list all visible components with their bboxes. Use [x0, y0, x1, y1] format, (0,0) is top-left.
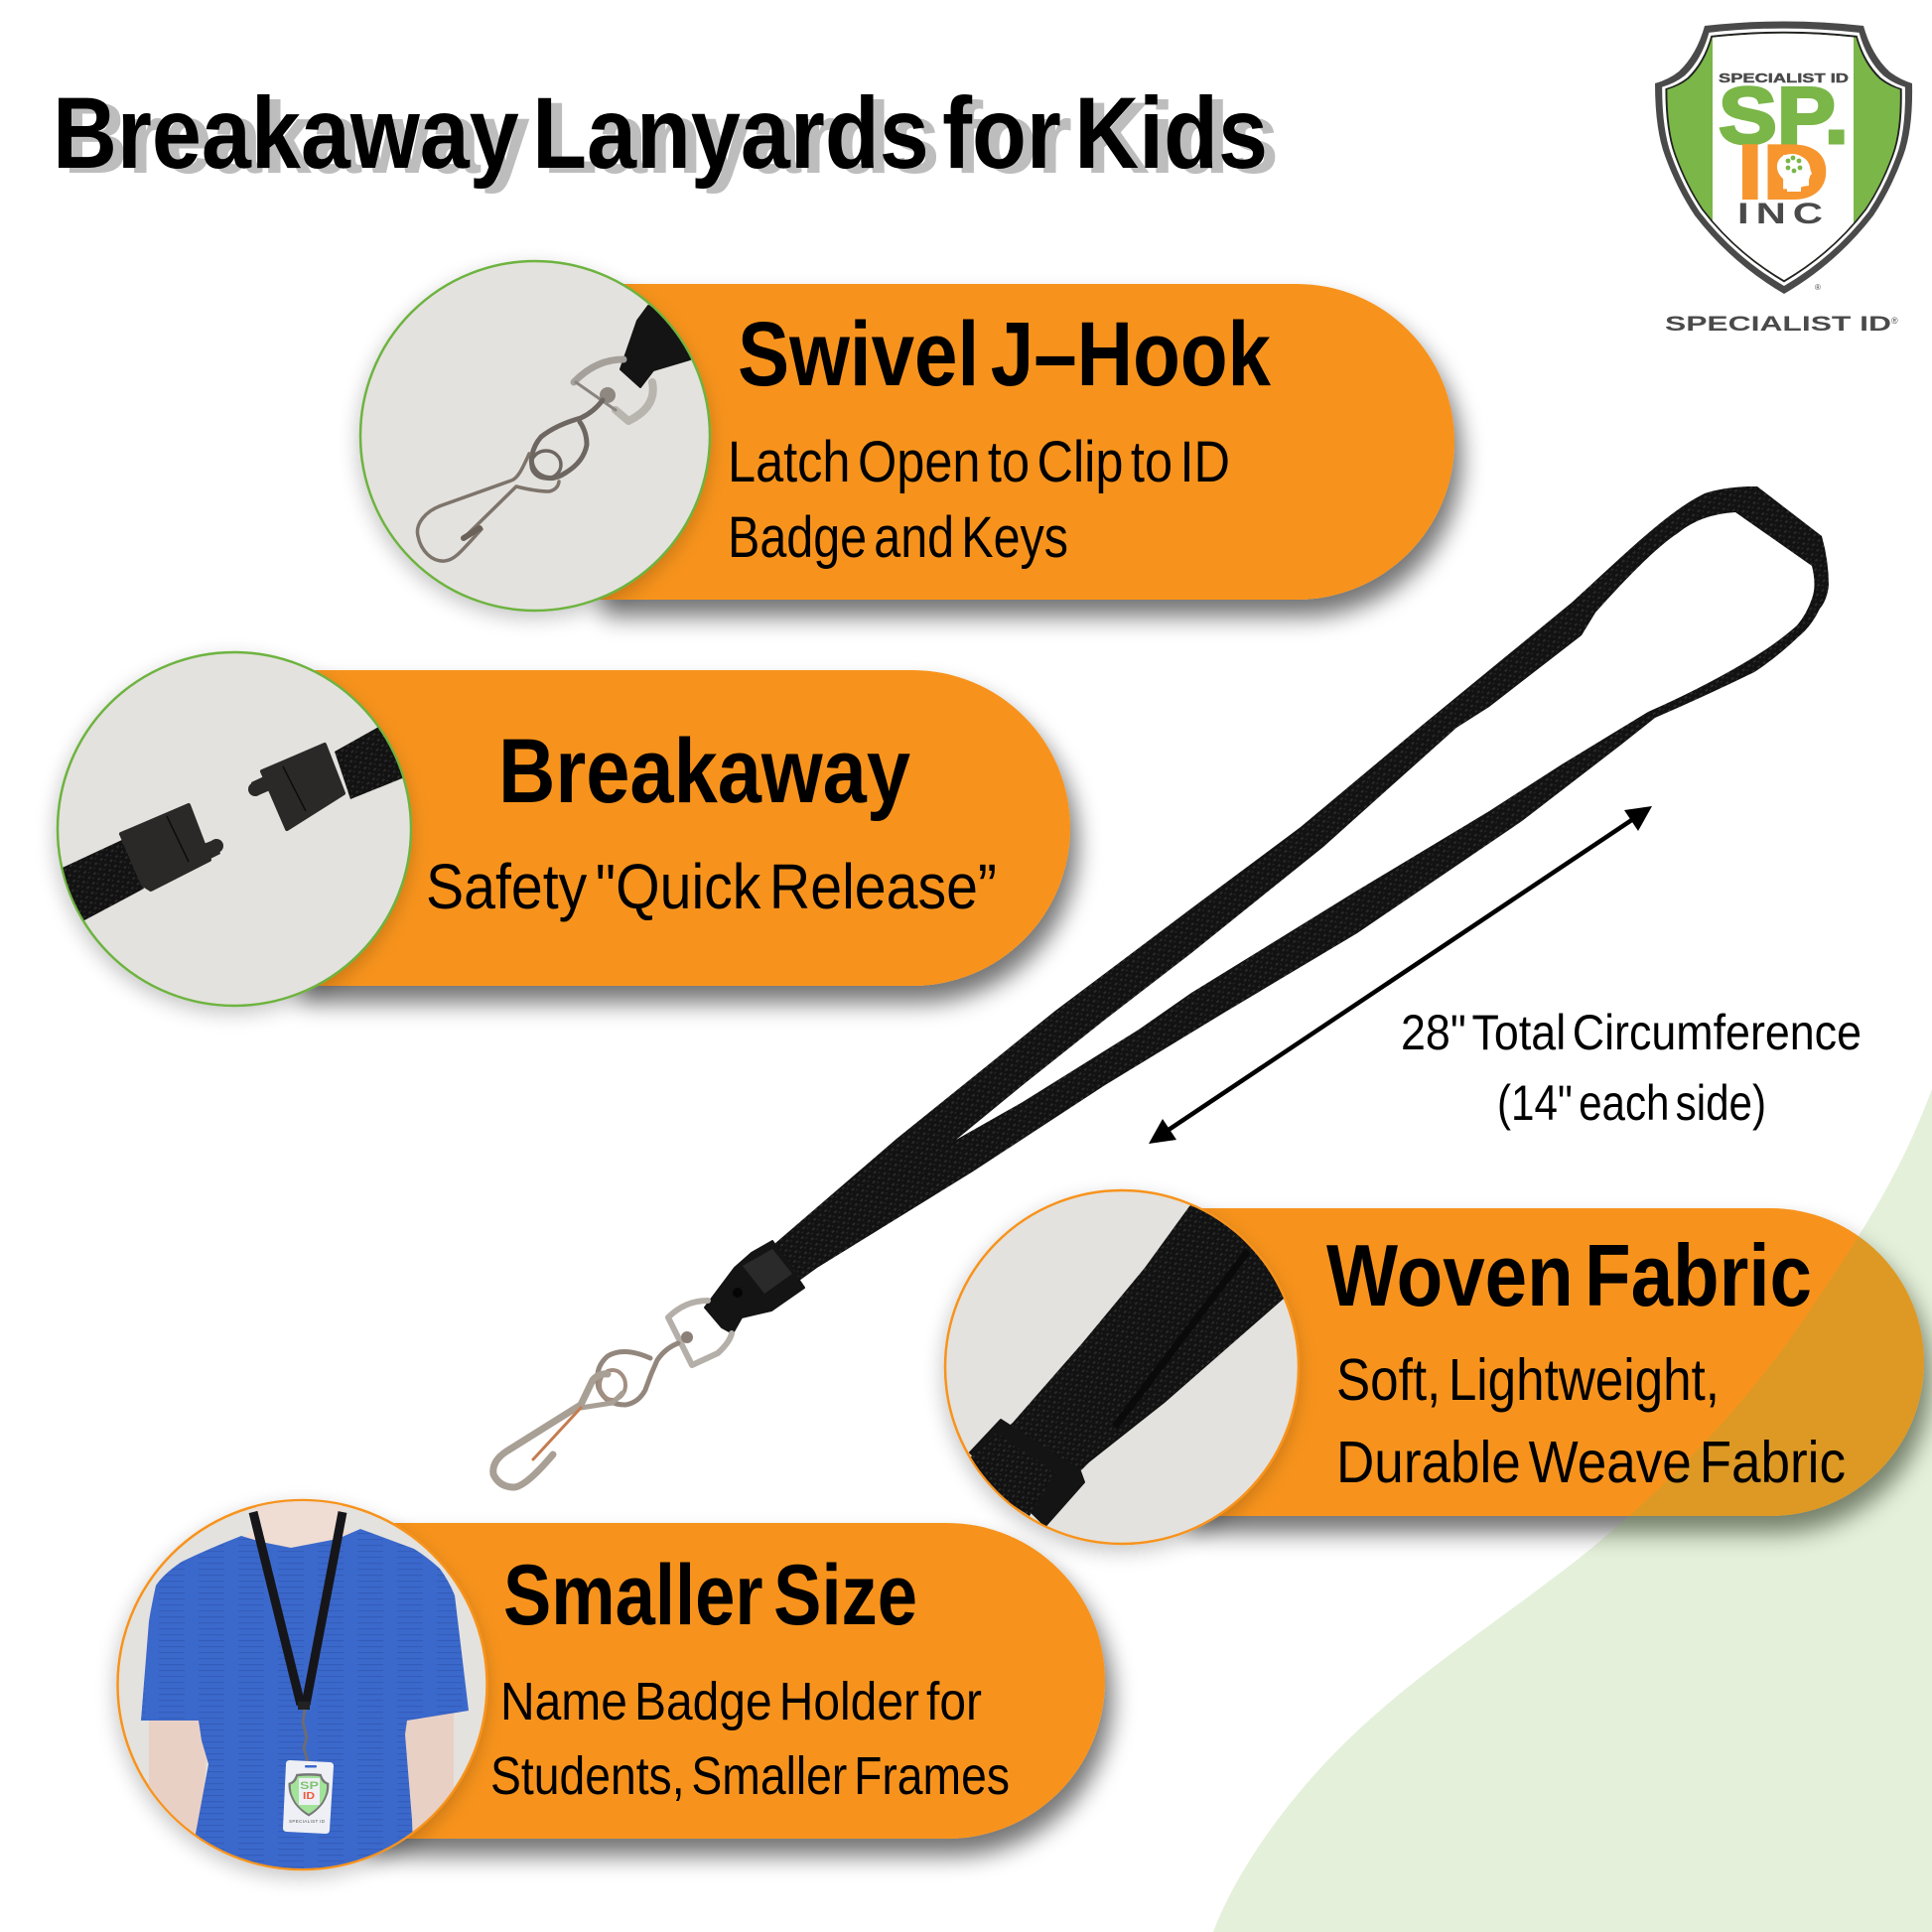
dimension label — [1401, 1005, 1862, 1131]
circle: child wearing lanyard photo — [117, 1494, 486, 1876]
dimension arrow — [1149, 806, 1652, 1144]
logo: Specialist ID shield — [1655, 20, 1912, 336]
logo text: ® — [1815, 283, 1821, 292]
logo text: SP. — [1719, 71, 1849, 161]
lanyard photo — [493, 486, 1829, 1487]
heading and text: smaller size: Name Badge Holder for — [500, 1672, 982, 1731]
logo text: SPECIALIST ID — [1719, 70, 1849, 85]
logo text: ID — [1737, 128, 1829, 215]
heading and text: woven fabric: Soft, Lightweight, — [1336, 1347, 1720, 1413]
ID badge — [283, 1760, 334, 1834]
title: Breakaway Lanyards for Kids — [53, 76, 1268, 190]
heading and text: smaller size: Smaller Size — [503, 1548, 917, 1643]
heading and text: swivel j-hook: Swivel J–Hook — [738, 304, 1272, 405]
panel: swivel j-hook pill — [596, 284, 1454, 600]
icon: separated clasp — [63, 727, 403, 920]
ID badge: ID — [303, 1791, 315, 1802]
heading and text: breakaway — [426, 721, 997, 922]
logo text: ® — [1891, 316, 1898, 326]
heading and text: swivel j-hook — [728, 304, 1272, 570]
background green blob — [1213, 1089, 1932, 1932]
heading and text: woven fabric: Woven Fabric — [1326, 1226, 1812, 1324]
lanyard clasp — [705, 1241, 804, 1333]
heading and text: woven fabric: Durable Weave Fabric — [1336, 1430, 1846, 1495]
heading and text: woven fabric — [1326, 1226, 1846, 1495]
panel: smaller size pill — [361, 1523, 1105, 1839]
panel: breakaway pill — [294, 670, 1070, 986]
logo text: INC — [1737, 198, 1830, 230]
logo text — [1665, 70, 1898, 336]
icon: woven strap close-up — [969, 1205, 1284, 1526]
heading and text: breakaway: Breakaway — [498, 721, 910, 822]
ID badge: SPECIALIST ID — [289, 1819, 326, 1824]
logo text: SPECIALIST ID — [1665, 313, 1891, 336]
icon: swivel hook — [417, 306, 715, 561]
logo shield outline — [1655, 20, 1912, 298]
heading and text: smaller size: Students, Smaller Frames — [490, 1746, 1010, 1806]
dimension label: (14" each side) — [1497, 1075, 1766, 1131]
heading and text: swivel j-hook: Latch Open to Clip to ID — [728, 430, 1230, 494]
circle: woven fabric photo — [945, 1181, 1330, 1544]
lanyard strap — [774, 486, 1829, 1281]
lanyard hook — [493, 1301, 732, 1487]
heading and text: smaller size — [490, 1548, 1010, 1806]
title: Breakaway Lanyards for Kids — [64, 81, 1279, 195]
logo head icon — [1777, 154, 1812, 192]
circle: breakaway photo — [50, 652, 412, 1006]
circle: swivel j-hook photo — [360, 261, 715, 611]
dimension label: 28" Total Circumference — [1401, 1005, 1862, 1060]
panel: woven fabric pill — [1181, 1208, 1924, 1516]
heading and text: swivel j-hook: Badge and Keys — [728, 505, 1068, 570]
ID badge: SP — [300, 1780, 319, 1792]
heading and text: breakaway: Safety "Quick Release” — [426, 851, 997, 922]
person's lanyard — [253, 1512, 343, 1765]
photo: child in blue shirt — [141, 1494, 469, 1876]
